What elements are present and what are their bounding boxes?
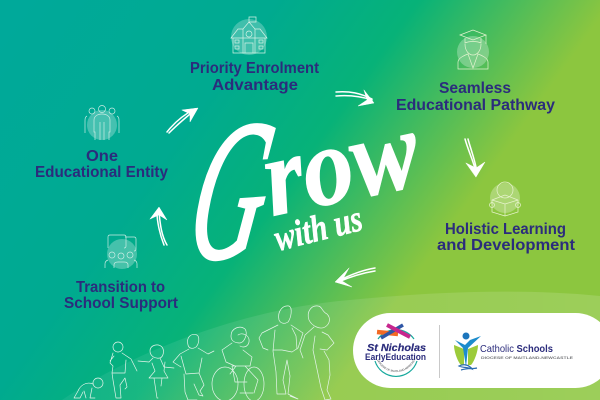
icon: graduate	[457, 30, 489, 69]
icon: transition speech bubbles	[105, 235, 137, 269]
man running	[259, 306, 303, 399]
arrow: transition to one	[150, 207, 167, 245]
heading: seamless educational pathway: Seamless	[439, 80, 511, 97]
title: Grow with us: row	[251, 85, 430, 240]
heading: holistic learning and development: and Development	[437, 237, 576, 254]
arrow: one to priority	[167, 108, 198, 133]
heading: seamless educational pathway	[396, 80, 555, 114]
logo: Catholic Schools: Catholic Schools	[480, 343, 553, 355]
heading: priority enrolment advantage	[190, 60, 320, 94]
heading: priority enrolment advantage: Priority Enrolment	[190, 60, 320, 77]
icon: school	[231, 17, 267, 55]
logo: Catholic Schools	[454, 332, 573, 370]
arrow: seamless to holistic	[465, 139, 485, 177]
icon: group of people	[85, 106, 119, 140]
heading: one educational entity	[35, 148, 168, 181]
arrow: priority to seamless	[336, 90, 374, 106]
illustration: people growing up	[74, 306, 334, 400]
heading: transition to school support	[64, 279, 179, 312]
arrow: holistic to transition	[335, 268, 375, 287]
logo: St Nicholas Early Education: EarlyEducation	[365, 352, 426, 362]
logo: St Nicholas Early Education	[365, 323, 426, 377]
logo: St Nicholas Early Education: DIOCESE OF MAITLAND-NEWCASTLE	[377, 358, 415, 372]
heading: priority enrolment advantage: Advantage	[212, 77, 298, 94]
hill curve	[62, 292, 600, 400]
heading: one educational entity: Educational Entity	[35, 164, 168, 181]
heading: holistic learning and development	[437, 221, 576, 254]
heading: one educational entity: One	[86, 148, 118, 165]
heading: seamless educational pathway: Educational Pathway	[396, 97, 555, 114]
icon: reader with book	[490, 182, 520, 216]
woman running	[300, 306, 334, 400]
heading: transition to school support: School Support	[64, 295, 179, 312]
baby crawling	[74, 378, 103, 398]
logo: Catholic Schools: DIOCESE OF MAITLAND-NEWCASTLE	[481, 355, 573, 360]
heading: holistic learning and development: Holistic Learning	[445, 221, 566, 238]
boy walking	[173, 334, 214, 400]
girl skipping	[138, 345, 174, 398]
heading: transition to school support: Transition to	[76, 279, 165, 296]
divider	[439, 325, 440, 378]
logo panel	[353, 313, 600, 388]
wheelchair user and helper	[212, 327, 264, 400]
logo: St Nicholas Early Education: St Nicholas	[367, 343, 426, 354]
child running	[110, 342, 137, 398]
title: Grow with us: with us	[270, 198, 366, 260]
title: Grow with us: G	[176, 78, 288, 304]
title: Grow with us	[176, 78, 430, 304]
